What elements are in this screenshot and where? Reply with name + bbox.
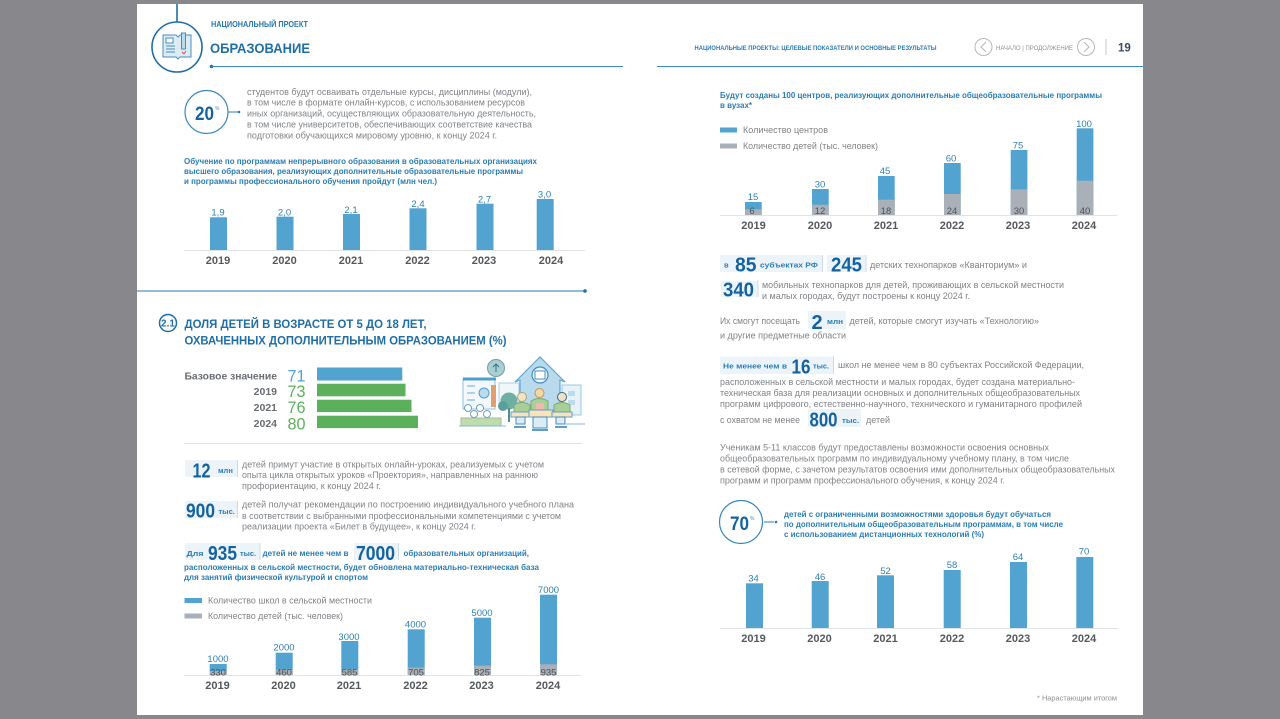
- stacked bar chart: centers: 2020: [808, 220, 832, 232]
- section divider: [137, 289, 587, 293]
- stat: 900 thousand: реализации проекта «Билет в будущее», к концу 2024 г.: [242, 522, 476, 532]
- stat: 935 thousand children, 7000 organizations: Для: [186, 549, 204, 558]
- stat: 900 thousand: детей получат рекомендации по построению индивидуального учебного плана: [242, 500, 574, 510]
- stacked bar chart: rural schools: 7000: [538, 585, 559, 596]
- horizontal bar chart: share of children: 80: [288, 414, 306, 434]
- bar chart: continuing education: 2023: [472, 255, 496, 267]
- callout: 70 percent: %: [750, 516, 755, 522]
- header rule right: [657, 66, 1143, 68]
- bar chart: continuing education: 2,7: [478, 194, 491, 206]
- heading: continuing education: высшего образования, реализующих дополнительные образовательные программы: [184, 166, 523, 176]
- stacked bar chart: centers: 24: [947, 206, 957, 217]
- horizontal bar chart: share of children: 2024: [254, 418, 277, 430]
- stacked bar chart: centers: 75: [1013, 140, 1023, 152]
- stat: 16 thousand schools, 800 thousand children: [720, 356, 1084, 432]
- header rule left: [210, 65, 623, 68]
- horizontal bar chart: share of children: 2021: [254, 402, 277, 414]
- stat: 16 thousand schools, 800 thousand children: 16: [792, 356, 810, 378]
- stat: 935 thousand children, 7000 organizations: для занятий физической культурой и спортом: [184, 572, 368, 582]
- stat: 935 thousand children, 7000 organizations: 935: [208, 543, 237, 565]
- section heading 2.1: 2.1: [161, 318, 175, 330]
- stat: 16 thousand schools, 800 thousand children: тыс.: [813, 362, 829, 370]
- stat: 85 regions, 245 and 340 technoparks: детских технопарков «Кванториум» и: [870, 260, 1027, 270]
- bar chart: children with disabilities: 2022: [940, 633, 964, 645]
- legend: rural schools chart: Количество школ в сельской местности: [208, 596, 372, 606]
- stacked bar chart: rural schools: 2019: [205, 680, 230, 692]
- stacked bar chart: rural schools: 2024: [536, 680, 561, 692]
- stat: 85 regions, 245 and 340 technoparks: мобильных технопарков для детей, проживающих в сельской местности: [762, 280, 1064, 290]
- bar chart: continuing education: [184, 190, 585, 267]
- stat: 935 thousand children, 7000 organizations: 7000: [356, 543, 395, 565]
- footnote: * Нарастающим итогом: [1037, 696, 1117, 702]
- bar chart: children with disabilities: 2023: [1006, 633, 1030, 645]
- stacked bar chart: centers: 18: [881, 206, 891, 217]
- stat: 2 million: Их смогут посещать: [720, 316, 800, 326]
- text block: grades 5-11: в сетевой форме, с зачетом результатов освоения ими дополнительных общеобразовательных: [720, 464, 1115, 474]
- bar chart: children with disabilities: [720, 546, 1118, 645]
- stacked bar chart: rural schools: 825: [474, 668, 490, 678]
- header right: running title and navigation: НАЦИОНАЛЬНЫЕ ПРОЕКТЫ: ЦЕЛЕВЫЕ ПОКАЗАТЕЛИ И ОСНОВНЫЕ РЕЗУЛЬТАТЫ: [694, 46, 937, 52]
- section heading 2.1: ДОЛЯ ДЕТЕЙ В ВОЗРАСТЕ ОТ 5 ДО 18 ЛЕТ,: [184, 316, 426, 331]
- stat: 16 thousand schools, 800 thousand children: 800: [810, 410, 838, 432]
- header: project logo and title: [152, 4, 310, 72]
- stat: 900 thousand: [185, 500, 574, 532]
- bar chart: continuing education: 1,9: [211, 208, 225, 218]
- stacked bar chart: rural schools: 330: [210, 668, 226, 678]
- section heading 2.1: ОХВАЧЕННЫХ ДОПОЛНИТЕЛЬНЫМ ОБРАЗОВАНИЕМ (%): [184, 334, 506, 348]
- stat: 2 million: млн: [827, 317, 843, 326]
- bar chart: children with disabilities: 70: [1079, 546, 1089, 558]
- stat: 16 thousand schools, 800 thousand children: техническая база для реализации основных и дополнительных общеобразовательных: [720, 388, 1080, 398]
- illustration: classroom and school building: [459, 357, 585, 430]
- legend: rural schools chart: [184, 596, 372, 621]
- stat: 16 thousand schools, 800 thousand children: программ цифрового, естественно-научного, технического и гуманитарного профилей: [720, 399, 1082, 409]
- stacked bar chart: rural schools: 2000: [273, 643, 295, 654]
- stat: 16 thousand schools, 800 thousand children: с охватом не менее: [720, 415, 800, 425]
- bar chart: continuing education: 2,0: [278, 208, 291, 218]
- horizontal bar chart: share of children: [184, 366, 418, 434]
- stat: 900 thousand: 900: [186, 500, 215, 522]
- stat: 12 million: млн: [218, 466, 233, 475]
- callout: 20 percent: [185, 87, 536, 140]
- bar chart: continuing education: 2019: [206, 255, 230, 267]
- stacked bar chart: rural schools: 4000: [405, 620, 426, 631]
- stacked bar chart: rural schools: 2021: [337, 680, 361, 692]
- callout: 20 percent: иных организаций, осуществляющих образовательную деятельность,: [247, 108, 536, 118]
- stacked bar chart: rural schools: 705: [408, 668, 424, 678]
- text block: grades 5-11: [720, 442, 1115, 486]
- icon: open book with pencil: [163, 33, 191, 59]
- stacked bar chart: rural schools: 2022: [403, 680, 428, 692]
- stacked bar chart: rural schools: 460: [276, 668, 292, 678]
- stat: 2 million: и другие предметные области: [720, 330, 846, 340]
- stat: 2 million: [720, 311, 1039, 340]
- header right: running title and navigation: 19: [1118, 42, 1131, 54]
- stacked bar chart: rural schools: 5000: [471, 608, 493, 619]
- stacked bar chart: centers: 2019: [741, 220, 766, 232]
- stacked bar chart: centers: 30: [1014, 206, 1024, 217]
- stat: 12 million: профориентацию, к концу 2024 г.: [242, 481, 381, 491]
- horizontal bar chart: share of children: 71: [288, 366, 306, 386]
- stat: 16 thousand schools, 800 thousand children: тыс.: [842, 416, 859, 425]
- header: project logo and title: НАЦИОНАЛЬНЫЙ ПРОЕКТ: [211, 20, 308, 29]
- bar chart: children with disabilities: 64: [1013, 552, 1023, 563]
- stacked bar chart: rural schools: 1000: [207, 654, 229, 665]
- stacked bar chart: rural schools: 2020: [271, 680, 296, 692]
- header right: running title and navigation: НАЧАЛО | ПРОДОЛЖЕНИЕ: [996, 46, 1073, 52]
- callout: 20 percent: студентов будут осваивать отдельные курсы, дисциплины (модули),: [247, 87, 532, 97]
- stat: 935 thousand children, 7000 organizations: тыс.: [240, 549, 256, 558]
- heading: 100 centers: Будут созданы 100 центров, реализующих дополнительные общеобразовательные программы: [720, 90, 1102, 100]
- stat: 85 regions, 245 and 340 technoparks: в: [724, 260, 729, 270]
- stacked bar chart: centers: 2023: [1006, 220, 1030, 232]
- stat: 12 million: [185, 460, 544, 491]
- callout: 70 percent: 70: [730, 513, 749, 535]
- legend: centers chart: [720, 125, 878, 151]
- stacked bar chart: centers: 2021: [874, 220, 898, 232]
- heading: 100 centers: [720, 90, 1102, 110]
- bar chart: continuing education: 2,1: [344, 205, 358, 216]
- callout: 70 percent: детей с ограниченными возможностями здоровья будут обучаться: [784, 509, 1051, 519]
- callout: 20 percent: 20: [195, 103, 214, 125]
- stat: 16 thousand schools, 800 thousand children: детей: [866, 415, 890, 425]
- stat: 935 thousand children, 7000 organizations: образовательных организаций,: [404, 548, 529, 558]
- stacked bar chart: centers: 6: [749, 206, 755, 217]
- stacked bar chart: centers: 45: [880, 166, 890, 177]
- stacked bar chart: rural schools: 2023: [469, 680, 494, 692]
- icon: previous arrow: [975, 38, 992, 56]
- stat: 935 thousand children, 7000 organizations: детей не менее чем в: [262, 548, 348, 558]
- header right: running title and navigation: [694, 38, 1131, 56]
- header: project logo and title: ОБРАЗОВАНИЕ: [210, 40, 310, 56]
- heading: 100 centers: в вузах*: [720, 100, 753, 110]
- bar chart: continuing education: 2021: [339, 255, 363, 267]
- icon: next arrow: [1078, 38, 1094, 56]
- text block: grades 5-11: общеобразовательных программ по индивидуальному учебному плану, в том числе: [720, 454, 1069, 464]
- stacked bar chart: centers: 30: [815, 180, 825, 190]
- callout: 70 percent: [720, 500, 1063, 544]
- bar chart: children with disabilities: 2020: [807, 633, 832, 645]
- page sheet: [137, 4, 1143, 715]
- stat: 85 regions, 245 and 340 technoparks: 85: [735, 254, 756, 276]
- stat: 935 thousand children, 7000 organizations: [184, 543, 539, 582]
- bar chart: children with disabilities: 52: [880, 566, 891, 577]
- stacked bar chart: centers: 2022: [940, 220, 964, 232]
- stat: 85 regions, 245 and 340 technoparks: 340: [723, 280, 754, 302]
- text block: grades 5-11: программ и программ профессионального обучения, к концу 2024 г.: [720, 476, 1005, 486]
- callout: 20 percent: в том числе в формате онлайн-курсов, с использованием ресурсов: [247, 98, 525, 108]
- stat: 85 regions, 245 and 340 technoparks: [720, 254, 1064, 302]
- heading: continuing education: Обучение по программам непрерывного образования в образовательных организациях: [184, 156, 537, 166]
- legend: centers chart: Количество детей (тыс. человек): [743, 141, 878, 151]
- stacked bar chart: centers: 60: [946, 154, 956, 164]
- horizontal bar chart: share of children: Базовое значение: [184, 372, 277, 382]
- horizontal bar chart: share of children: 73: [288, 382, 306, 401]
- bar chart: children with disabilities: 2024: [1072, 633, 1097, 645]
- bar chart: children with disabilities: 58: [947, 560, 957, 571]
- callout: 20 percent: в том числе университетов, обеспечивающих соответствие качества: [247, 120, 532, 130]
- stat: 16 thousand schools, 800 thousand children: Не менее чем в: [723, 362, 787, 370]
- bar chart: continuing education: 2020: [272, 255, 297, 267]
- stat: 85 regions, 245 and 340 technoparks: и малых городах, будут построены к концу 2024 г.: [762, 291, 970, 301]
- bar chart: children with disabilities: 46: [815, 572, 825, 583]
- horizontal bar chart: share of children: 2019: [254, 386, 277, 398]
- stacked bar chart: rural schools: [184, 585, 581, 692]
- stat: 12 million: 12: [192, 460, 210, 482]
- stat: 16 thousand schools, 800 thousand children: школ не менее чем в 80 субъектах Российской Федерации,: [838, 360, 1084, 370]
- stat: 2 million: 2: [812, 312, 823, 334]
- callout: 20 percent: %: [215, 106, 220, 112]
- stat: 935 thousand children, 7000 organizations: расположенных в сельской местности, будет обновлена материально-техническая база: [184, 562, 539, 572]
- bar chart: continuing education: 2024: [539, 255, 564, 267]
- stat: 12 million: детей примут участие в открытых онлайн-уроках, реализуемых с учетом: [242, 460, 544, 470]
- bar chart: continuing education: 3,0: [538, 190, 551, 200]
- bar chart: children with disabilities: 2021: [873, 633, 898, 645]
- stacked bar chart: centers: 40: [1080, 206, 1090, 217]
- stat: 2 million: детей, которые смогут изучать «Технологию»: [850, 316, 1039, 326]
- horizontal bar chart: share of children: 76: [288, 398, 306, 417]
- stacked bar chart: centers: [720, 119, 1117, 232]
- legend: rural schools chart: Количество детей (тыс. человек): [208, 611, 343, 621]
- stacked bar chart: rural schools: 3000: [338, 632, 360, 643]
- stacked bar chart: centers: 15: [748, 192, 758, 203]
- heading: continuing education: и программы профессионального обучения пройдут (млн чел.): [184, 176, 437, 186]
- stat: 85 regions, 245 and 340 technoparks: 245: [831, 254, 862, 276]
- stacked bar chart: rural schools: 935: [541, 668, 556, 678]
- legend: centers chart: Количество центров: [743, 125, 828, 135]
- stat: 900 thousand: тыс.: [218, 507, 235, 516]
- callout: 70 percent: по дополнительным общеобразовательным программам, в том числе: [784, 519, 1063, 529]
- stat: 12 million: опыта цикла открытых уроков «Проектория», направленных на раннюю: [242, 470, 538, 480]
- stat: 16 thousand schools, 800 thousand children: расположенных в сельской местности и малых городах, будет создана материально-: [720, 377, 1075, 387]
- section heading 2.1: [160, 314, 506, 348]
- stat: 900 thousand: в соответствии с выбранными профессиональными компетенциями с учетом: [242, 511, 561, 521]
- bar chart: children with disabilities: 2019: [741, 633, 766, 645]
- callout: 70 percent: с использованием дистанционных технологий (%): [784, 529, 984, 539]
- stacked bar chart: centers: 12: [815, 206, 825, 217]
- stacked bar chart: centers: 2024: [1072, 220, 1097, 232]
- bar chart: continuing education: 2,4: [411, 199, 425, 210]
- heading: continuing education: [184, 156, 537, 186]
- text block: grades 5-11: Ученикам 5-11 классов будут предоставлены возможности освоения основных: [720, 442, 1049, 452]
- bar chart: continuing education: 2022: [405, 255, 430, 267]
- stat: 85 regions, 245 and 340 technoparks: субъектах РФ: [760, 260, 819, 270]
- stacked bar chart: rural schools: 585: [342, 668, 357, 678]
- stacked bar chart: centers: 100: [1076, 119, 1092, 130]
- bar chart: children with disabilities: 34: [748, 574, 759, 584]
- callout: 20 percent: подготовки обучающихся мировому уровню, к концу 2024 г.: [247, 130, 497, 140]
